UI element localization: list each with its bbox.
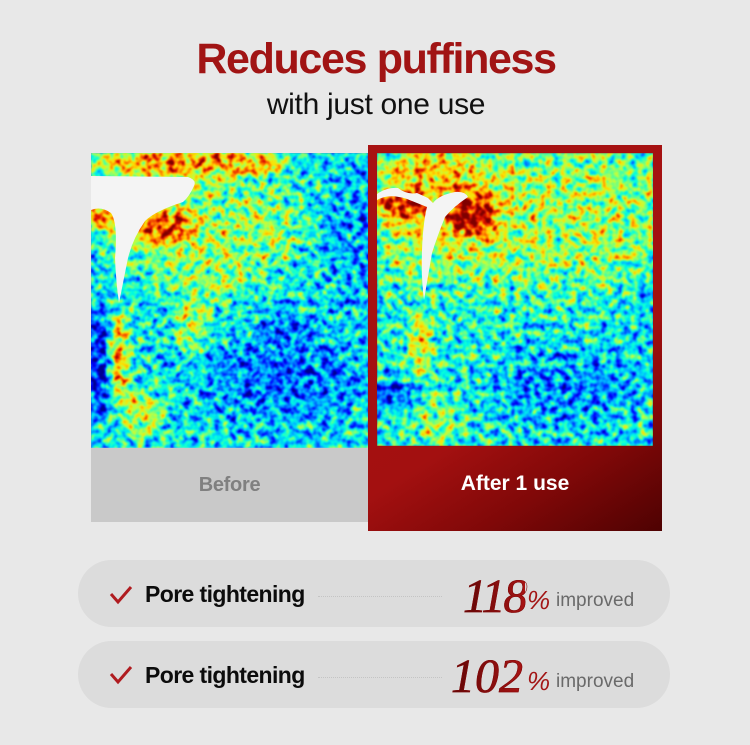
panel: after bbox=[368, 145, 662, 531]
caption: improved: improved bbox=[556, 671, 634, 692]
value: 102: 102 bbox=[451, 650, 523, 703]
label: pore tightening: Pore tightening bbox=[145, 662, 305, 688]
heatmap: before bbox=[91, 153, 368, 448]
subtitle: with just one use bbox=[267, 88, 485, 121]
white highlight: before bbox=[91, 176, 195, 303]
result row: 102% bbox=[78, 641, 670, 708]
heatmap: after bbox=[377, 153, 653, 446]
label: pore tightening: Pore tightening bbox=[145, 581, 305, 607]
white highlight: after bbox=[377, 188, 468, 300]
label: after: After 1 use bbox=[461, 472, 569, 495]
value: 118: 118 bbox=[463, 570, 525, 623]
title: Reduces puffiness bbox=[196, 35, 556, 83]
percent sign: % bbox=[527, 585, 550, 615]
caption: improved: improved bbox=[556, 590, 634, 611]
result row: 118% bbox=[78, 560, 670, 627]
icon: check bbox=[110, 666, 132, 684]
percent sign: % bbox=[527, 666, 550, 696]
panel: before bbox=[91, 153, 368, 522]
label: before: Before bbox=[199, 474, 260, 496]
icon: check bbox=[110, 586, 132, 604]
